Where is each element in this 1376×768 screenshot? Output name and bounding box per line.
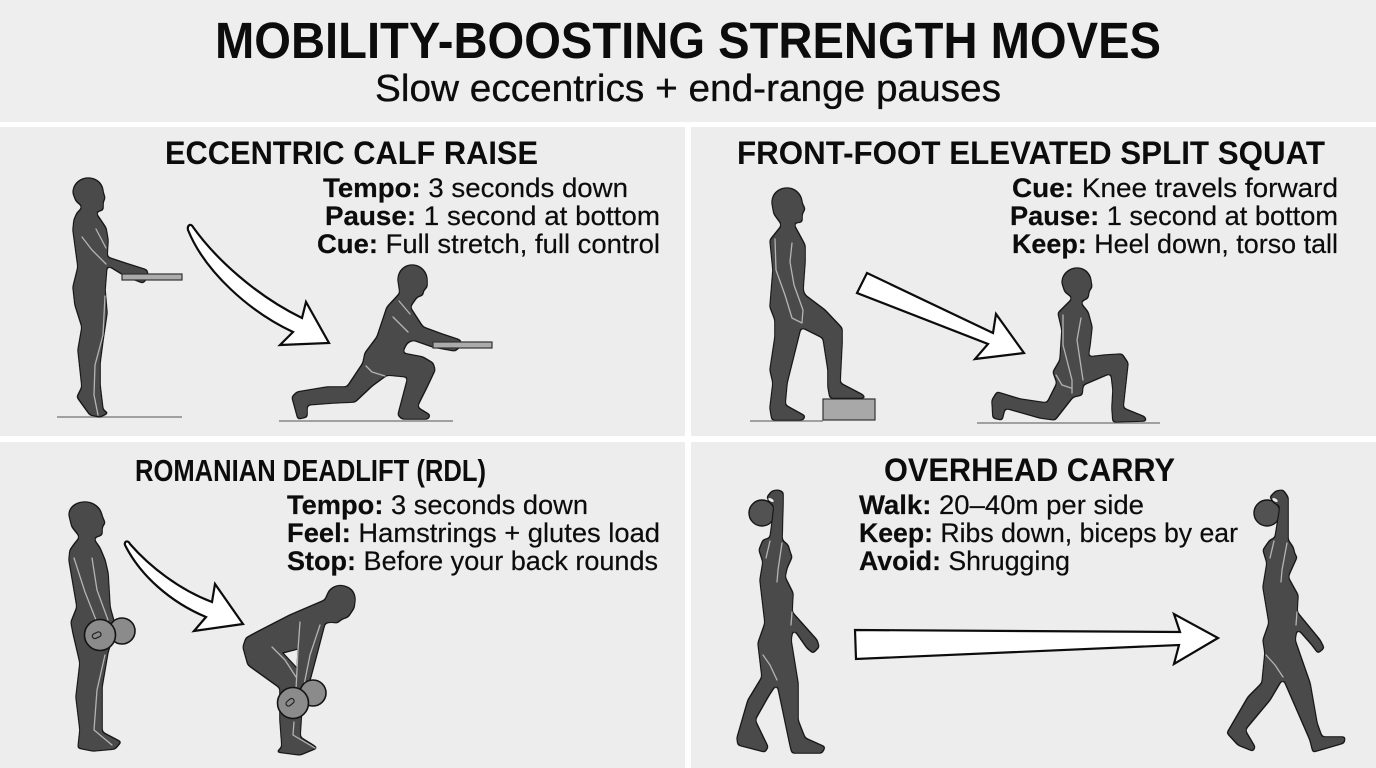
instructions: calf raise: Cue: Full stretch, full control [317,229,660,259]
arrow: straight to kneeling lunge [857,273,1024,359]
panel: overhead carry [691,442,1376,768]
instructions: calf raise: Pause: 1 second at bottom [325,201,660,231]
figure: bottom of split squat [977,268,1160,423]
instructions: carry: Keep: Ribs down, biceps by ear [859,518,1238,548]
header panel [0,0,1376,122]
instructions: deadlift [287,490,660,576]
instructions: calf raise [317,173,660,259]
instructions: deadlift: Stop: Before your back rounds [287,546,658,576]
instructions: carry: Walk: 20–40m per side [859,490,1144,520]
title: MOBILITY-BOOSTING STRENGTH MOVES [215,12,1161,69]
instructions: carry [859,490,1238,576]
arrow: curved down to hinge [125,541,243,631]
subtitle: Slow eccentrics + end-range pauses [375,68,1001,110]
heading: split squat: FRONT-FOOT ELEVATED SPLIT SQUAT [737,135,1325,171]
heading: overhead carry: OVERHEAD CARRY [884,452,1175,488]
figure: walking with kettlebell overhead, left [737,490,825,753]
figure: deep lunge holding support [279,265,492,421]
figure: walking with kettlebell overhead, right [1227,490,1345,752]
heading: eccentric calf raise: ECCENTRIC CALF RAISE [165,135,538,171]
panel: eccentric calf raise [0,127,685,436]
figure: standing holding dumbbell [69,502,135,751]
panel: front-foot elevated split squat [691,127,1376,436]
instructions: carry: Avoid: Shrugging [859,546,1070,576]
arrow: long straight carry [855,614,1218,664]
instructions: calf raise: Tempo: 3 seconds down [323,173,628,203]
instructions: deadlift: Feel: Hamstrings + glutes load [287,518,660,548]
arrow: curved down to lunge [188,225,329,345]
instructions: split squat [1010,173,1338,259]
figure: hip hinge with dumbbell [243,586,355,755]
panel: romanian deadlift [0,442,685,768]
figure: standing on toes holding support [57,178,182,417]
instructions: deadlift: Tempo: 3 seconds down [287,490,588,520]
instructions: split squat: Keep: Heel down, torso tall [1012,229,1338,259]
instructions: split squat: Pause: 1 second at bottom [1010,201,1338,231]
figure: standing with front foot on step [750,188,875,421]
heading: romanian deadlift: ROMANIAN DEADLIFT (RDL) [135,453,486,488]
instructions: split squat: Cue: Knee travels forward [1012,173,1338,203]
